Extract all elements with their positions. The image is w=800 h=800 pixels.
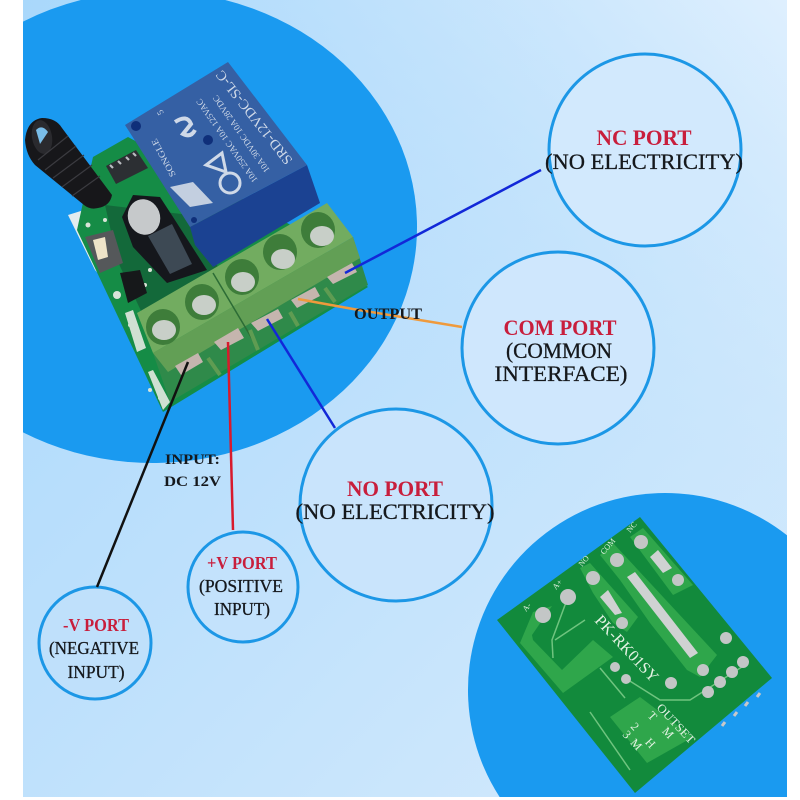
terminal screws [152, 226, 334, 340]
pin header [106, 150, 148, 184]
tact switch [85, 230, 123, 273]
block front band [153, 237, 360, 372]
board printed text: A- [521, 601, 533, 613]
chip [120, 270, 147, 303]
label: COM description line 1: (COMMON [506, 338, 612, 363]
callout circle: COM port [462, 252, 654, 444]
block fins [208, 288, 335, 375]
terminal holes [146, 212, 335, 345]
board printed text: A+ [551, 577, 564, 591]
screw plates [175, 263, 357, 375]
relay printed text: SRD-12VDC-SL-C [214, 67, 296, 167]
board printed text: TM [645, 708, 677, 742]
label: NC port: NC PORT [596, 125, 692, 150]
input label: DC 12V [164, 474, 221, 490]
relay printed text: 5 [155, 108, 166, 117]
relay printed text [149, 67, 296, 185]
board printed text: COM [599, 537, 617, 556]
terminal block [137, 203, 368, 402]
block lower face [153, 237, 368, 402]
relay printed text: 10A 250VAC 10A 125VAC [194, 97, 260, 185]
label: NO port: NO PORT [347, 476, 443, 501]
board printed text: 2H [628, 719, 659, 751]
label: NC description: (NO ELECTRICITY) [545, 149, 743, 174]
relay printed text: SONGLE [149, 136, 178, 179]
board outline [497, 517, 772, 793]
label: +V description line 2: INPUT) [214, 599, 270, 620]
relay top [125, 62, 307, 227]
relay logo stripes [170, 182, 213, 207]
label: COM port: COM PORT [504, 315, 617, 340]
board printed text: OUTSET [654, 700, 699, 747]
antenna coil [25, 118, 112, 209]
connector line: NC port [345, 170, 541, 273]
callout circle: NO port [296, 409, 494, 601]
label: +V port: +V PORT [207, 553, 277, 573]
board printed text: 3M [620, 727, 645, 753]
connector line: NO port [267, 319, 335, 428]
relay module photo [25, 62, 368, 412]
board printed text: NC [625, 520, 639, 534]
blue backdrop circle: bottom right [468, 493, 787, 797]
long solder strips [600, 550, 698, 658]
input label: INPUT: [165, 452, 220, 468]
relay side [190, 165, 320, 267]
white sticker [68, 205, 125, 278]
connector line: +V port [228, 342, 233, 530]
connector line: -V port [97, 362, 188, 587]
callout circle: +V port [188, 532, 298, 642]
label: -V description line 2: INPUT) [68, 662, 124, 683]
thin traces [552, 597, 745, 770]
label: -V port: -V PORT [63, 615, 129, 635]
output label: OUTPUT [354, 306, 422, 323]
copper traces [520, 528, 717, 763]
label: +V description line 1: (POSITIVE [199, 576, 283, 597]
relay [125, 62, 320, 267]
label: NO description: (NO ELECTRICITY) [296, 499, 494, 524]
relay printed text: 10A 30VDC 10A 28VDC [211, 93, 272, 175]
solder pads [535, 535, 749, 698]
capacitor [122, 195, 207, 283]
label: -V description line 1: (NEGATIVE [49, 638, 139, 659]
callout circle: -V port [39, 587, 151, 699]
label: COM description line 2: INTERFACE) [494, 361, 628, 386]
connector line: COM port [298, 299, 462, 327]
board printed text: NO [577, 553, 591, 568]
callout circle: NC port [545, 54, 743, 246]
block top face [137, 203, 353, 353]
board printed text [521, 520, 699, 753]
circuit board [77, 137, 368, 412]
input label [164, 452, 221, 490]
board printed text: PK-RK01SY [591, 612, 662, 686]
circuit board back photo [497, 517, 772, 793]
pins [722, 693, 760, 726]
blue backdrop circle: top left [23, 0, 417, 463]
